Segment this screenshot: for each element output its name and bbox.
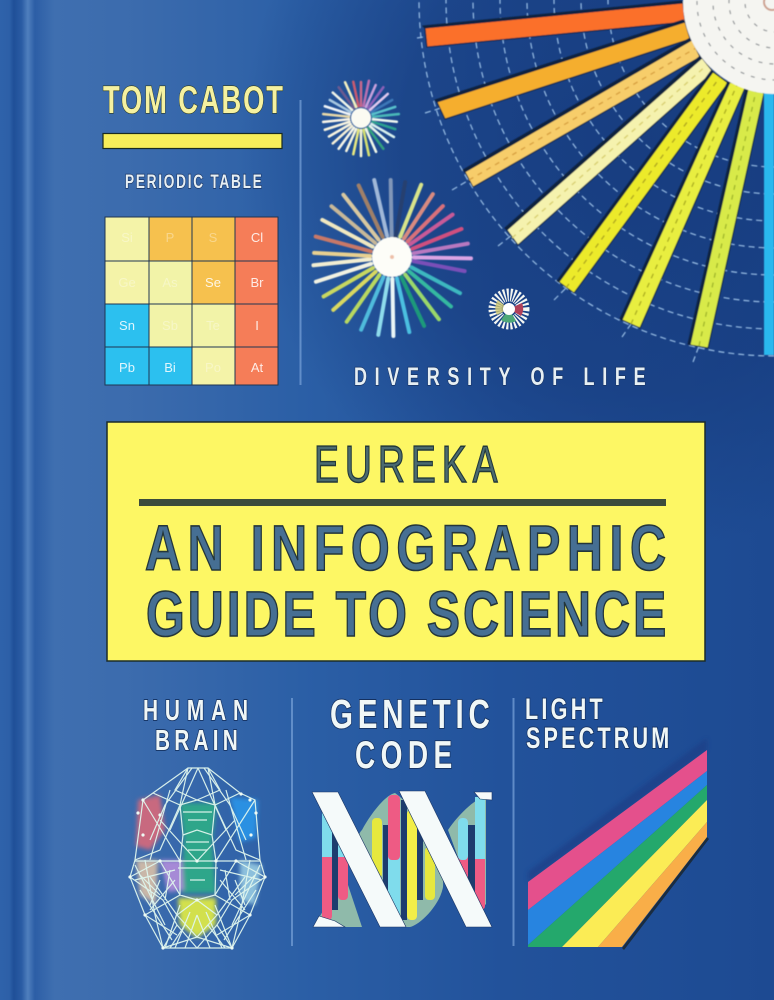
periodic table: I: [255, 318, 259, 333]
periodic table: Ge: [118, 275, 136, 290]
vertical divider: right: [512, 698, 514, 946]
heading: light spectrum: LIGHT: [525, 691, 603, 726]
vertical divider: top: [300, 100, 302, 385]
heading: periodic table: PERIODIC TABLE: [125, 171, 262, 193]
title line two: GUIDE TO SCIENCE: [146, 579, 666, 650]
periodic table: Se: [205, 275, 221, 290]
author underline bar: [103, 134, 282, 148]
periodic table: Te: [206, 318, 220, 333]
periodic table: Pb: [119, 360, 135, 375]
base pair bars: [322, 807, 332, 920]
light spectrum prism bands: [528, 738, 709, 950]
heading: diversity of life: DIVERSITY OF LIFE: [354, 362, 646, 391]
brain network illustration: [128, 768, 267, 950]
heading: human brain: BRAIN: [155, 725, 238, 757]
heading: light spectrum: [525, 691, 669, 755]
periodic table: Br: [250, 275, 264, 290]
back strands: [318, 793, 486, 927]
periodic table: Sb: [162, 318, 178, 333]
white ribbons: [312, 791, 492, 927]
radial spectrum fan chart: [417, 0, 774, 362]
heading: genetic code: CODE: [355, 734, 452, 777]
periodic table: Sn: [119, 318, 135, 333]
tiny species burst: [495, 295, 523, 323]
heading: light spectrum: SPECTRUM: [526, 720, 669, 755]
large species burst: [313, 180, 471, 336]
periodic table: P: [166, 230, 174, 245]
ray bars: [423, 1, 764, 348]
heading: genetic code: [330, 691, 490, 777]
vertical divider: left: [291, 698, 293, 946]
periodic table: As: [162, 275, 178, 290]
periodic table: Po: [205, 360, 221, 375]
periodic table: [105, 217, 278, 385]
periodic table: Cl: [251, 230, 263, 245]
bar centre dashes: [469, 48, 756, 346]
heading: genetic code: GENETIC: [330, 691, 490, 737]
periodic table: At: [251, 360, 264, 375]
strand shadows: [332, 800, 475, 920]
title rule: [139, 499, 666, 506]
periodic table: Si: [121, 230, 133, 245]
author name: TOM CABOT: [103, 79, 283, 122]
heading: human brain: HUMAN: [143, 695, 248, 727]
DNA double helix illustration: [312, 791, 492, 927]
title line one: AN INFOGRAPHIC: [145, 513, 666, 584]
white hub disc: [683, 0, 774, 94]
cyan bar: [764, 93, 774, 355]
periodic table: S: [209, 230, 218, 245]
series title: EUREKA: [314, 435, 498, 493]
periodic table: Bi: [164, 360, 176, 375]
dashed polar grid: [417, 0, 774, 362]
small species burst: [323, 81, 399, 156]
heading: human brain: [143, 695, 248, 757]
yellow title panel: [107, 422, 705, 661]
